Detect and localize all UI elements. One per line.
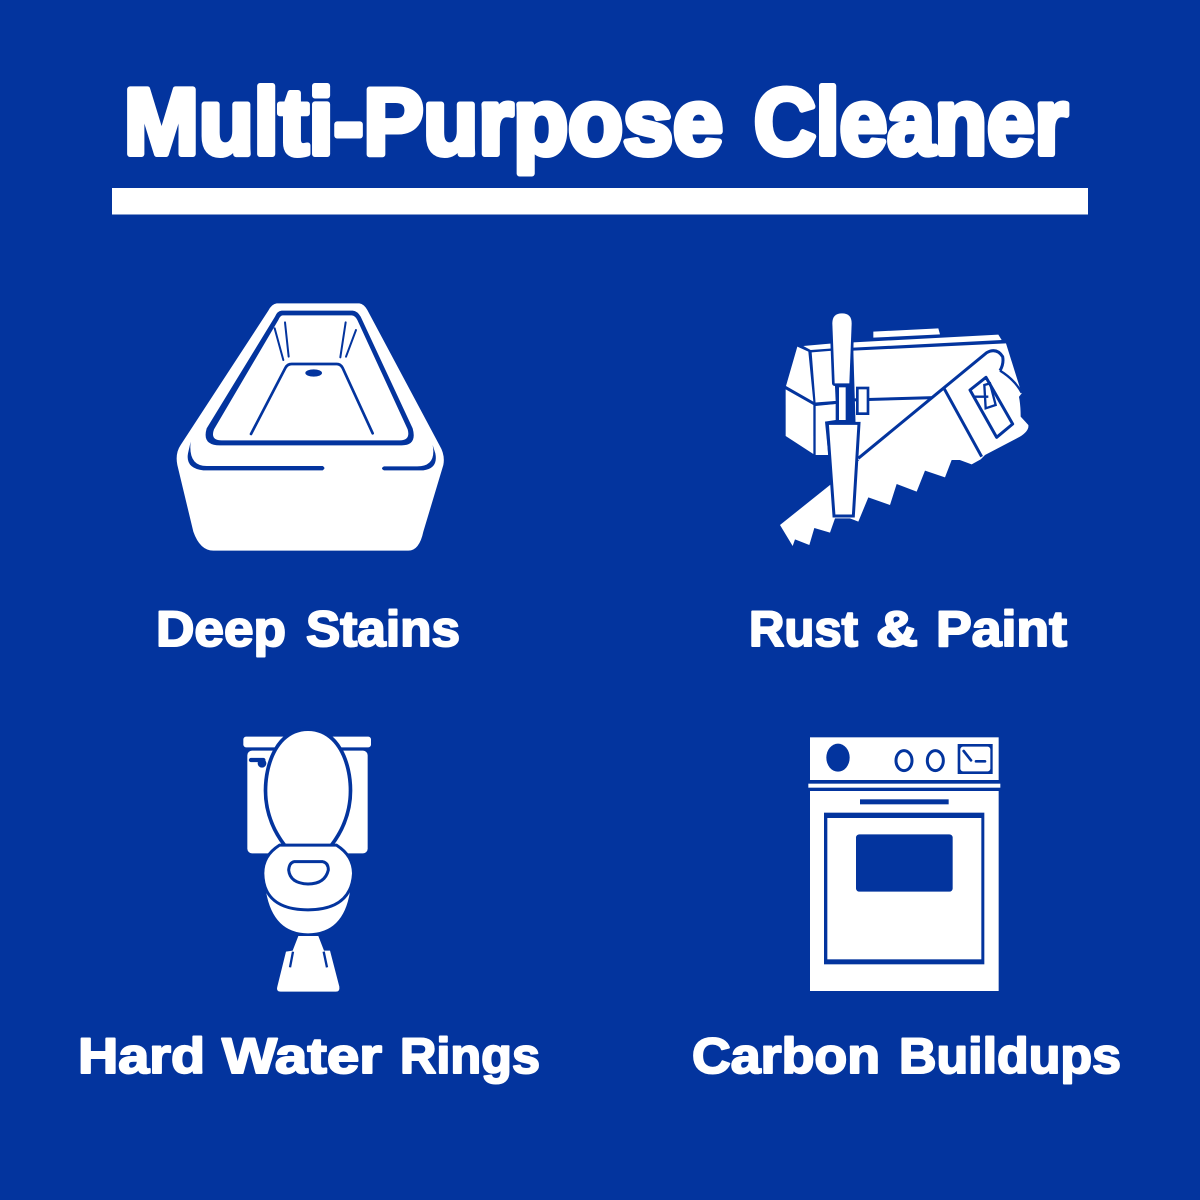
- label: Rust & Paint: &: [876, 601, 918, 657]
- title: [124, 69, 1068, 174]
- icon: toilet: [243, 731, 371, 992]
- label: Hard Water Rings: [78, 1028, 540, 1084]
- title: Multi-Purpose: [124, 69, 723, 174]
- label: Deep Stains: Stains: [306, 601, 460, 657]
- icon: toolbox, saw and chisel: [780, 313, 1028, 546]
- clasp: [857, 388, 868, 414]
- chisel: [827, 313, 859, 516]
- label: Hard Water Rings: Rings: [400, 1028, 540, 1084]
- title underline: [112, 188, 1088, 214]
- label: Rust & Paint: [749, 601, 1067, 657]
- label: Rust & Paint: Rust: [749, 601, 858, 657]
- label: Rust & Paint: Paint: [936, 601, 1067, 657]
- label: Deep Stains: [156, 601, 460, 657]
- label: Carbon Buildups: [692, 1028, 1121, 1084]
- icon: bathtub: [177, 303, 444, 551]
- label: Hard Water Rings: Hard: [78, 1028, 205, 1084]
- label: Carbon Buildups: Carbon: [692, 1028, 880, 1084]
- label: Carbon Buildups: Buildups: [899, 1028, 1121, 1084]
- icon: oven: [808, 737, 1000, 991]
- label: Deep Stains: Deep: [156, 601, 286, 657]
- title: Cleaner: [754, 69, 1068, 174]
- saw: [780, 351, 1028, 546]
- label: Hard Water Rings: Water: [222, 1028, 382, 1084]
